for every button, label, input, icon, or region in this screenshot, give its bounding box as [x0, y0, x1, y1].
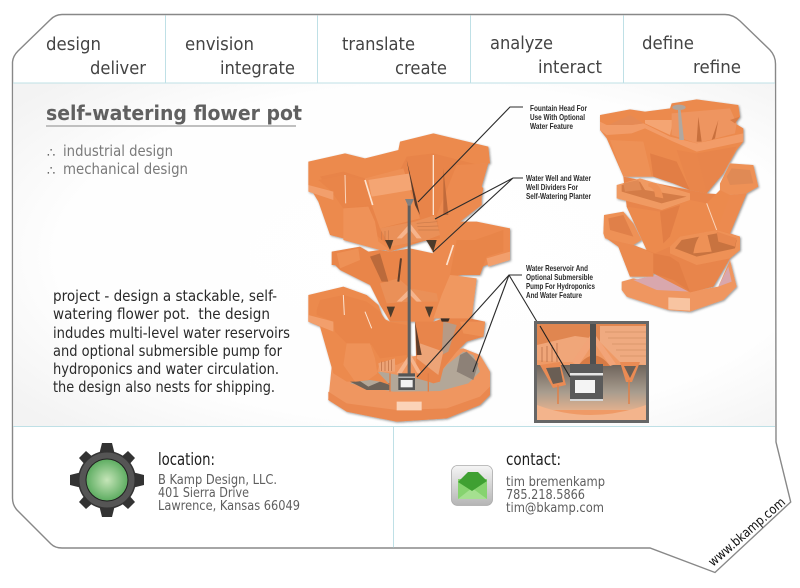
- discipline list: industrial design: [63, 142, 173, 160]
- project description: project - design a stackable, self-: [53, 287, 277, 305]
- main content panel: [13, 83, 775, 426]
- project description: [53, 287, 290, 396]
- callout: water well: Well Dividers For: [526, 182, 579, 192]
- navigation header words: create: [395, 59, 447, 79]
- project description: hydroponics and water circulation.: [53, 360, 279, 378]
- icon: mail: [452, 466, 492, 506]
- icon: gear: [70, 443, 144, 517]
- navigation header words: refine: [693, 58, 741, 78]
- fountain rod and head: [405, 199, 414, 374]
- navigation header words: interact: [538, 58, 602, 78]
- assembled bottom tier: [603, 212, 730, 292]
- assembled top tier: [600, 99, 743, 193]
- assembled body backing: [607, 177, 747, 292]
- assembled tray: [622, 260, 737, 312]
- callout: fountain head: Fountain Head For: [530, 103, 588, 113]
- project description: and optional submersible pump for: [53, 342, 283, 360]
- leader over inset: [540, 326, 570, 377]
- illustration: cutaway flower pot: [308, 133, 510, 422]
- callout: water well: Self-Watering Planter: [526, 191, 592, 201]
- navigation header words: define: [642, 34, 694, 54]
- location block: location:: [158, 450, 215, 469]
- discipline list: [47, 142, 188, 179]
- discipline list: ∴: [47, 146, 55, 161]
- navigation header words: integrate: [220, 59, 295, 79]
- bottom tier: [308, 287, 485, 392]
- contact block: tim bremenkamp: [506, 474, 605, 490]
- contact block: contact:: [506, 450, 561, 469]
- callout: water well: [526, 173, 592, 201]
- location block: [158, 450, 300, 514]
- project description: the design also nests for shipping.: [53, 378, 275, 396]
- navigation header words: deliver: [90, 59, 147, 79]
- assembled middle tier: [617, 163, 758, 253]
- inset: pump detail: [536, 322, 648, 422]
- navigation header words: envision: [185, 35, 254, 55]
- callout: water reservoir: Water Reservoir And: [526, 263, 588, 273]
- callout: fountain head: Use With Optional: [530, 112, 585, 122]
- callout: water reservoir: And Water Feature: [526, 290, 582, 300]
- callout: fountain head: [530, 103, 588, 131]
- website label: www.bkamp.com: [706, 495, 789, 570]
- leader lines: [417, 107, 570, 377]
- contact block: tim@bkamp.com: [506, 500, 604, 516]
- navigation header words: [46, 34, 741, 79]
- project description: watering flower pot. the design: [53, 305, 270, 323]
- contact block: 785.218.5866: [506, 487, 585, 503]
- pump: [398, 373, 415, 390]
- callout: fountain head: Water Feature: [530, 121, 573, 131]
- title: self-watering flower pot: [46, 101, 302, 125]
- middle tier: [332, 222, 510, 322]
- discipline list: mechanical design: [63, 160, 188, 178]
- callout: water reservoir: Optional Submersible: [526, 272, 593, 282]
- callout: water well: Water Well and Water: [526, 173, 592, 183]
- callout: water reservoir: [526, 263, 595, 300]
- contact block: [506, 450, 605, 516]
- location block: Lawrence, Kansas 66049: [158, 498, 300, 514]
- location block: 401 Sierra Drive: [158, 485, 249, 501]
- navigation header words: design: [46, 35, 101, 55]
- discipline list: ∴: [47, 164, 55, 179]
- callout: water reservoir: Pump For Hydroponics: [526, 281, 595, 291]
- pot tray base: [328, 348, 490, 422]
- navigation header words: translate: [342, 35, 415, 55]
- location block: B Kamp Design, LLC.: [158, 472, 277, 488]
- top tier: [308, 133, 490, 253]
- navigation header words: analyze: [490, 34, 553, 54]
- assembled front right tier: [670, 230, 740, 265]
- illustration: assembled stacked pot: [600, 99, 758, 312]
- project description: indudes multi-level water reservoirs: [53, 324, 290, 342]
